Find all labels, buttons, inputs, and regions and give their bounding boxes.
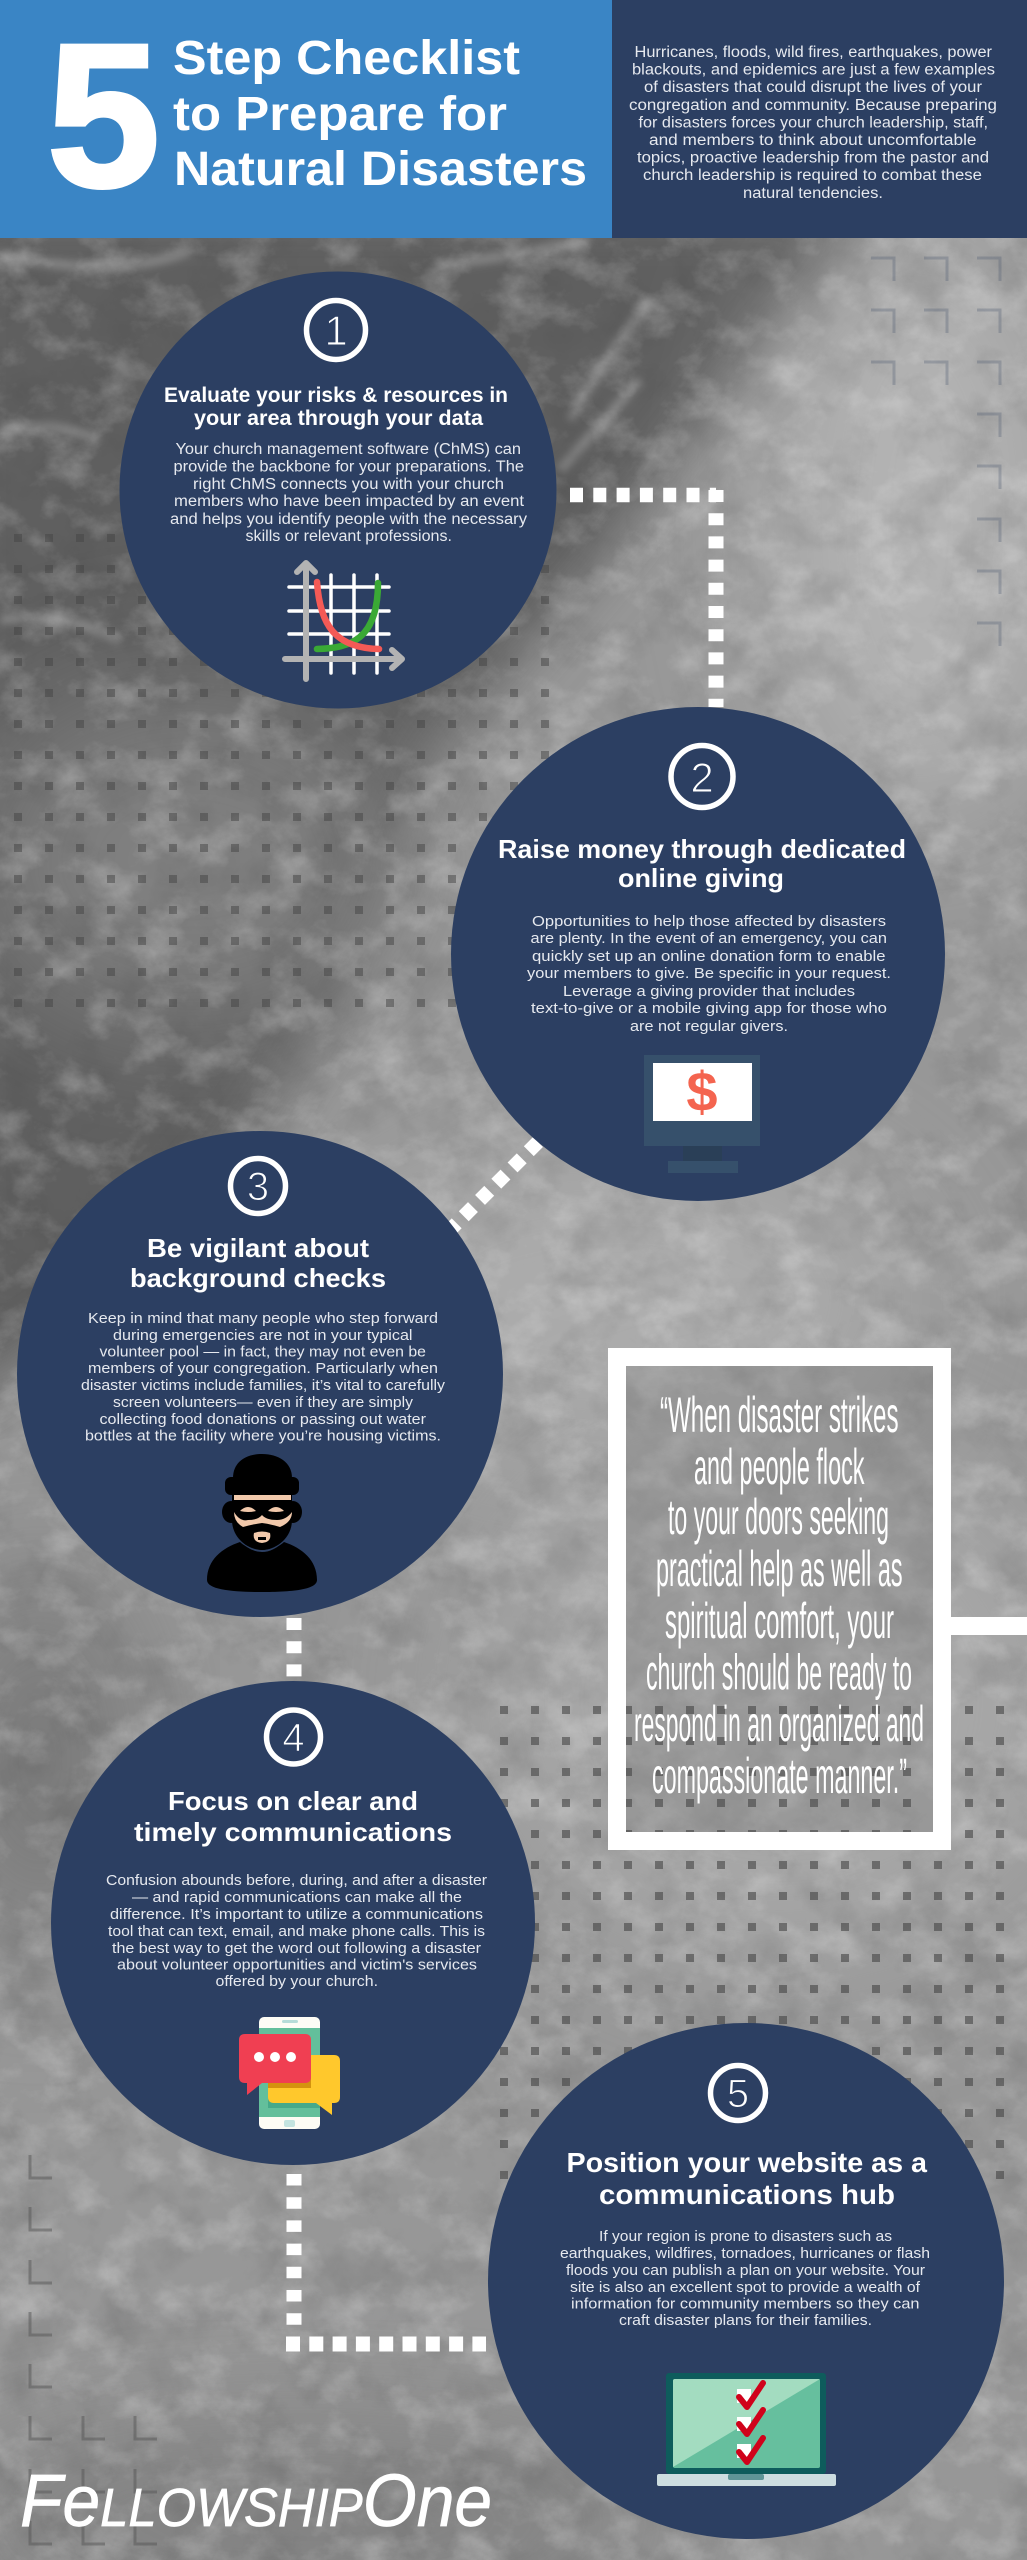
title heading xyxy=(173,32,587,196)
step 2 body text: quickly set up an online donation form to enable xyxy=(532,949,886,965)
step 5 body text: craft disaster plans for their families. xyxy=(619,2312,872,2329)
step 5 body text: If your region is prone to disasters such as xyxy=(599,2228,892,2245)
step 4 body text: — and rapid communications can make all the xyxy=(132,1889,462,1906)
callout: pull quote xyxy=(617,1357,942,1841)
step 2 body text xyxy=(527,914,891,1035)
icon: masked thief xyxy=(207,1454,317,1592)
panel: step 3 xyxy=(17,1131,503,1617)
step 3 body text: during emergencies are not in your typical xyxy=(113,1328,412,1344)
step 2 number badge xyxy=(671,746,733,808)
icon: line chart xyxy=(285,563,402,679)
step 3 heading: background checks xyxy=(130,1263,386,1293)
step 2 heading: Raise money through dedicated xyxy=(498,834,906,864)
step 1 body text: right ChMS connects you with your church xyxy=(193,476,504,493)
icon: computer monitor with dollar sign xyxy=(644,1055,760,1173)
panel: step 1 xyxy=(120,272,556,708)
step 3 number badge: 3 xyxy=(247,1165,269,1209)
step 1 number badge: 1 xyxy=(324,307,348,354)
step 1 body text: provide the backbone for your preparations. The xyxy=(174,458,524,476)
intro text: for disasters forces your church leadership, staff, xyxy=(638,114,988,132)
step 5 number badge: 5 xyxy=(727,2072,749,2116)
step 5 heading: communications hub xyxy=(599,2179,895,2210)
title heading: Step Checklist xyxy=(173,32,520,85)
quote connector line xyxy=(951,1617,1027,1635)
step 2 body text: text-to-give or a mobile giving app for those who xyxy=(531,1001,887,1017)
panel: step 4 xyxy=(51,1681,535,2165)
intro text: congregation and community. Because preparing xyxy=(629,97,997,114)
step 3 heading: Be vigilant about xyxy=(147,1233,369,1263)
step 2 body text: Opportunities to help those affected by disasters xyxy=(532,914,886,930)
step 4 heading xyxy=(134,1786,452,1847)
step 4 body text: offered by your church. xyxy=(216,1973,378,1990)
step 5 body text: earthquakes, wildfires, tornadoes, hurricanes or flash xyxy=(560,2245,930,2262)
step 2 body text: are plenty. In the event of an emergency, you can xyxy=(530,931,887,947)
step 5 body text: site is also an excellent spot to provide a wealth of xyxy=(570,2279,921,2296)
header: title panel xyxy=(0,0,612,238)
step 4 heading: timely communications xyxy=(134,1817,452,1847)
dotted connector 2 to 3 xyxy=(452,1142,538,1228)
step 4 body text: Confusion abounds before, during, and after a disaster xyxy=(106,1872,487,1889)
step 3 body text: screen volunteers— even if they are simply xyxy=(113,1395,414,1411)
step 4 body text: about volunteer opportunities and victim's services xyxy=(117,1956,477,1974)
logo: FellowshipOne: FeLLOWSHIPOne xyxy=(20,2459,492,2542)
step 4 body text xyxy=(106,1872,487,1990)
step 5 body text xyxy=(560,2228,930,2329)
decorative dot grid lower right xyxy=(500,1706,1010,2186)
step 4 number badge: 4 xyxy=(282,1716,305,1760)
step 3 number badge xyxy=(230,1158,286,1214)
step 3 body text: volunteer pool — in fact, they may not even be xyxy=(100,1344,426,1360)
intro text xyxy=(629,44,997,202)
step 3 body text: bottles at the facility where you’re housing victims. xyxy=(85,1428,441,1444)
step 3 body text: members of your congregation. Particularly when xyxy=(88,1361,438,1377)
intro text: natural tendencies. xyxy=(743,185,883,202)
step 5 body text: floods you can publish a plan on your website. Your xyxy=(566,2262,925,2279)
dotted connector 4 to 5 xyxy=(286,2174,486,2344)
step 3 heading xyxy=(130,1233,386,1293)
step 4 body text: tool that can text, email, and make phone calls. This is xyxy=(108,1923,485,1940)
step 1 body text xyxy=(170,441,527,545)
step 2 heading xyxy=(498,834,906,893)
intro text: of disasters that could disrupt the lives of your xyxy=(644,79,982,96)
step 4 body text: difference. It’s important to utilize a communications xyxy=(110,1906,483,1923)
icon: phone with chat bubbles xyxy=(239,2017,340,2129)
corner marks top right xyxy=(871,258,1000,646)
icon: computer monitor with dollar sign: $ xyxy=(686,1060,718,1123)
step 2 body text: Leverage a giving provider that includes xyxy=(563,984,855,1000)
step 1 body text: Your church management software (ChMS) can xyxy=(176,441,521,458)
step 1 body text: skills or relevant professions. xyxy=(246,528,452,545)
panel: step 2 xyxy=(451,707,945,1201)
step 2 heading: online giving xyxy=(618,863,784,893)
step 1 heading: Evaluate your risks & resources in xyxy=(164,383,508,407)
panel: step 5 xyxy=(488,2023,1004,2539)
title heading: Natural Disasters xyxy=(174,143,587,196)
intro text: and members to think about uncomfortable xyxy=(649,132,976,149)
step 1 number badge xyxy=(306,300,366,360)
step 5 heading xyxy=(566,2147,928,2210)
pull quote text xyxy=(634,1387,924,1804)
step 1 body text: members who have been impacted by an event xyxy=(174,493,525,510)
step 2 number badge: 2 xyxy=(690,754,714,801)
step 1 body text: and helps you identify people with the necessary xyxy=(170,511,527,528)
step 1 heading xyxy=(164,383,508,430)
dotted connector 1 to 2 xyxy=(570,489,716,707)
step 3 body text: disaster victims include families, it’s vital to carefully xyxy=(81,1378,446,1394)
intro text: Hurricanes, floods, wild fires, earthquakes, power xyxy=(634,44,992,61)
step 5 number badge xyxy=(710,2066,766,2120)
dotted connector 3 to 4 xyxy=(286,1618,302,1680)
step 4 body text: the best way to get the word out following a disaster xyxy=(112,1940,481,1957)
step 1 heading: your area through your data xyxy=(194,406,484,430)
step 4 number badge xyxy=(266,1710,320,1764)
step 3 body text: Keep in mind that many people who step forward xyxy=(88,1311,438,1327)
big number 5: 5 xyxy=(47,2,160,230)
step 5 body text: information for community members so they can xyxy=(571,2296,920,2312)
step 3 body text: collecting food donations or passing out water xyxy=(100,1412,426,1428)
icon: laptop with checklist xyxy=(657,2373,836,2486)
step 5 heading: Position your website as a xyxy=(566,2147,928,2178)
quote box translucent fill xyxy=(626,1366,933,1832)
decorative dot grid upper left xyxy=(14,534,551,1008)
intro text: church leadership is required to combat these xyxy=(643,167,982,184)
intro text: topics, proactive leadership from the pastor and xyxy=(637,150,989,166)
intro text: blackouts, and epidemics are just a few examples xyxy=(632,62,995,78)
step 2 body text: are not regular givers. xyxy=(630,1019,788,1035)
title heading: to Prepare for xyxy=(173,88,507,141)
step 4 heading: Focus on clear and xyxy=(168,1786,418,1816)
step 3 body text xyxy=(81,1311,446,1444)
header: intro panel xyxy=(612,0,1027,238)
corner marks lower left xyxy=(30,2155,157,2544)
step 2 body text: your members to give. Be specific in your request. xyxy=(527,966,891,982)
